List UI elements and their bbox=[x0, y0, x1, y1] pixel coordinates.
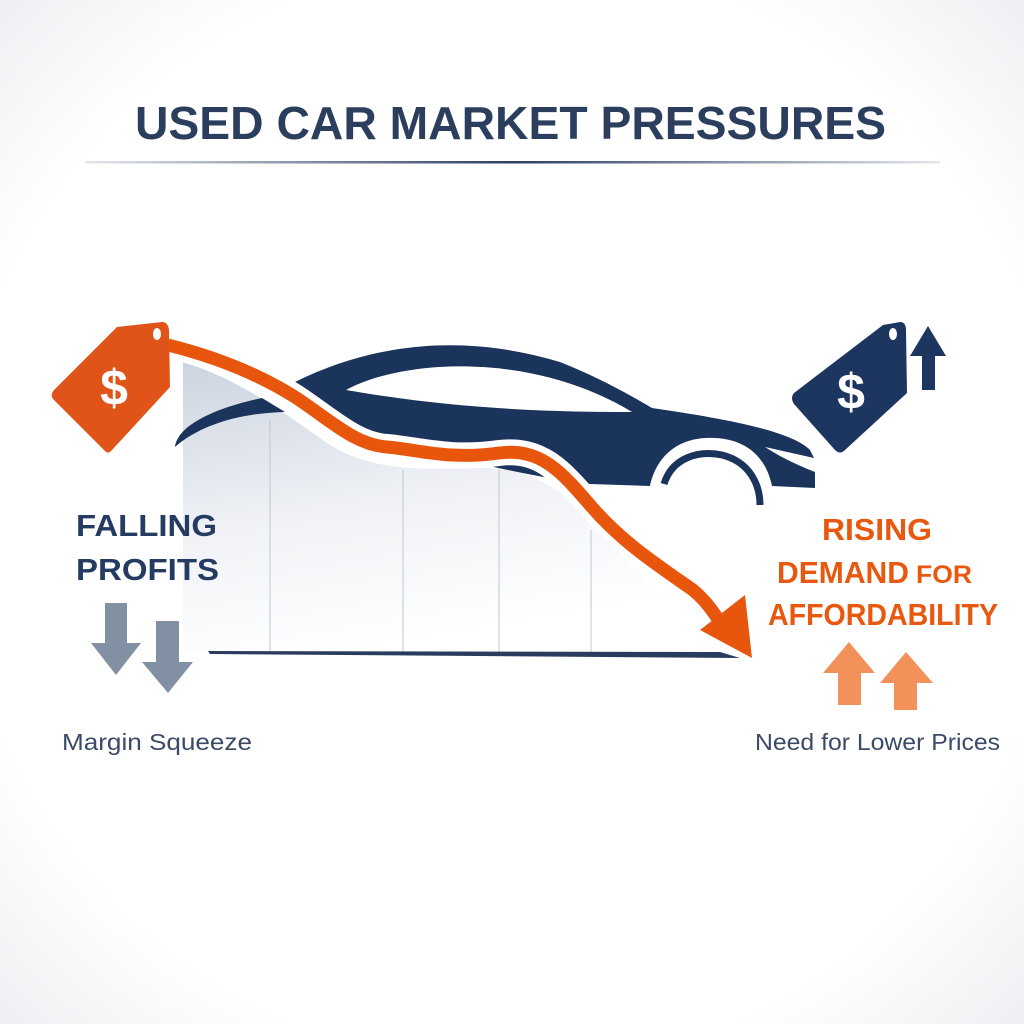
icon: gray down arrows bbox=[91, 603, 193, 693]
text: rising demand for affordability: DEMAND bbox=[777, 555, 909, 590]
icon: orange price tag bbox=[52, 322, 170, 452]
text: rising demand for affordability: RISING bbox=[822, 512, 932, 547]
title: USED CAR MARKET PRESSURES bbox=[135, 97, 886, 149]
text: rising demand for affordability: FOR bbox=[916, 561, 972, 589]
car silhouette bbox=[175, 345, 815, 505]
caption: margin squeeze: Margin Squeeze bbox=[62, 729, 252, 755]
text: falling profits: PROFITS bbox=[76, 552, 219, 587]
text: falling profits bbox=[76, 508, 219, 587]
icon: navy price tag with up arrow: $ bbox=[837, 364, 865, 420]
text: rising demand for affordability bbox=[768, 512, 998, 632]
chart: declining area bbox=[183, 362, 740, 658]
icon: orange up arrows bbox=[823, 642, 933, 710]
icon: orange price tag: $ bbox=[100, 360, 128, 416]
arrow: falling orange trend bbox=[168, 345, 752, 658]
text: falling profits: FALLING bbox=[76, 508, 217, 543]
caption: need for lower prices: Need for Lower Prices bbox=[755, 729, 1000, 755]
icon: navy price tag with up arrow bbox=[792, 322, 946, 452]
text: rising demand for affordability: AFFORDABILITY bbox=[768, 597, 998, 632]
